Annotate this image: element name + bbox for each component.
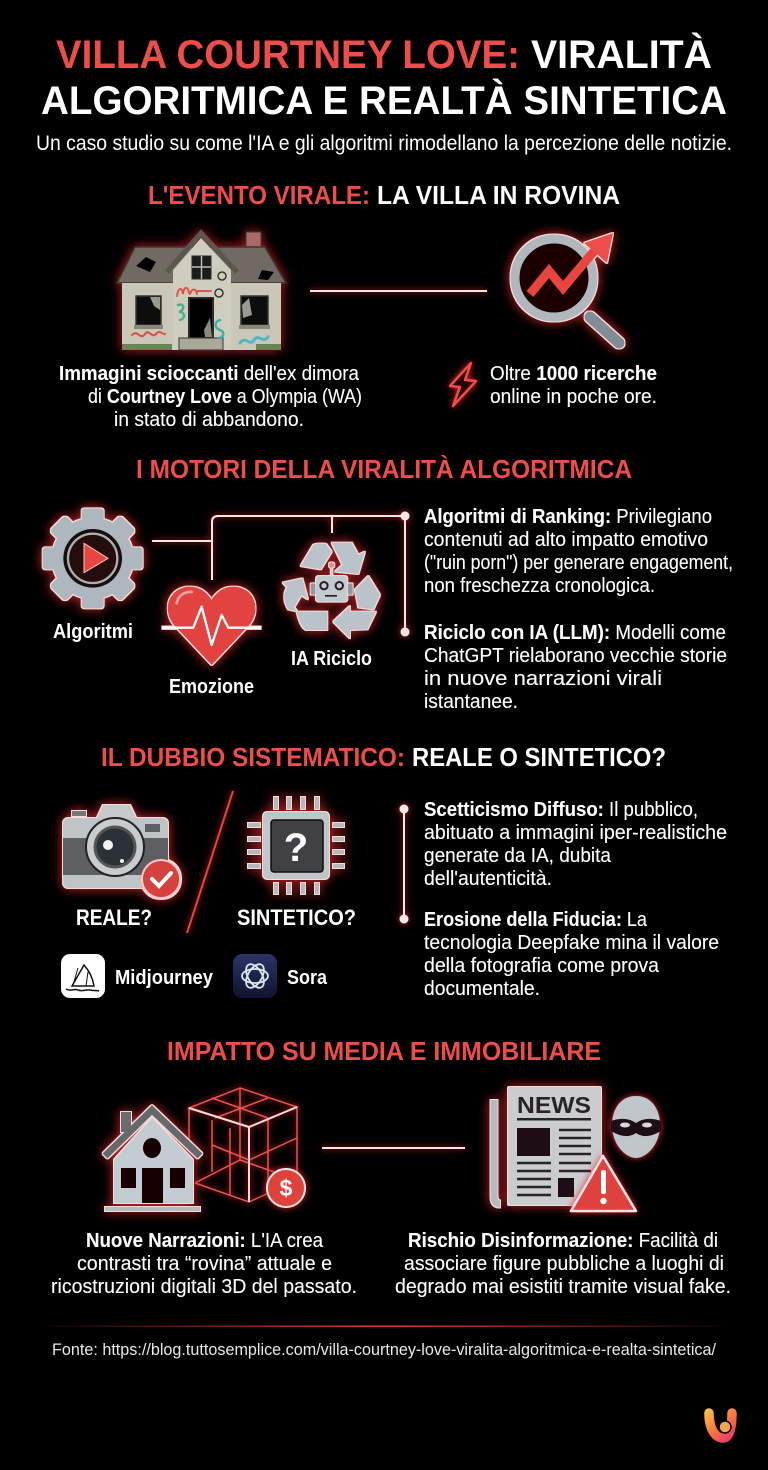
text: oltre 1000 ricerche bbox=[490, 363, 657, 408]
text: scetticismo diffuso bbox=[424, 799, 727, 890]
icon: lightning bbox=[450, 363, 476, 406]
icon: chip with question mark bbox=[248, 797, 344, 894]
source: Fonte: https://blog.tuttosemplice.com/villa-courtney-love-viralita-algoritmica-e-realta-sintetica/ bbox=[52, 1340, 716, 1359]
text: riciclo con ia: Riciclo con IA (LLM): Modelli come bbox=[424, 622, 726, 644]
label: reale: REALE? bbox=[76, 905, 152, 930]
title: ALGORITMICA E REALTÀ SINTETICA bbox=[41, 78, 727, 123]
text: oltre 1000 ricerche: online in poche ore. bbox=[490, 386, 657, 408]
heading: motori: I MOTORI DELLA VIRALITÀ ALGORITMICA bbox=[136, 454, 632, 484]
heading: dubbio sistematico bbox=[101, 742, 666, 772]
icon: recycling robot bbox=[283, 543, 380, 638]
logo tile: sora bbox=[233, 954, 277, 998]
icon: gear with play bbox=[43, 508, 143, 608]
text: immagini scioccanti bbox=[59, 363, 362, 431]
text: nuove narrazioni: ricostruzioni digitali 3D del passato. bbox=[51, 1276, 357, 1298]
text: erosione della fiducia: della fotografia come prova bbox=[424, 955, 660, 977]
title: VIRALITÀ bbox=[531, 32, 712, 77]
text: algoritmi di ranking: Algoritmi di Ranking: Privilegiano bbox=[424, 506, 712, 528]
text: riciclo con ia: ChatGPT rielaborano vecchie storie bbox=[424, 645, 727, 667]
text: scetticismo diffuso: generate da IA, dubita bbox=[424, 845, 612, 867]
icon: newspaper bbox=[494, 1087, 601, 1205]
text: immagini scioccanti: Immagini scioccanti dell'ex dimora bbox=[59, 363, 360, 385]
text: scetticismo diffuso: dell'autenticità. bbox=[424, 868, 552, 890]
heading: l'evento virale: L'EVENTO VIRALE: bbox=[148, 180, 370, 210]
connector line bbox=[310, 290, 487, 292]
footer divider bbox=[35, 1326, 733, 1327]
text: algoritmi di ranking: non freschezza cronologica. bbox=[424, 575, 655, 597]
connector with dots bbox=[400, 804, 408, 924]
text: rischio disinformazione: degrado mai esistiti tramite visual fake. bbox=[395, 1276, 731, 1298]
text: nuove narrazioni: contrasti tra “rovina” attuale e bbox=[77, 1253, 332, 1275]
icon: ruined house bbox=[117, 232, 286, 350]
text: riciclo con ia: in nuove narrazioni virali bbox=[424, 668, 662, 690]
heading: l'evento virale bbox=[148, 180, 620, 210]
icon: warning triangle bbox=[571, 1156, 636, 1211]
title: VILLA COURTNEY LOVE: bbox=[56, 33, 520, 77]
text: algoritmi di ranking: ("ruin porn") per generare engagement, bbox=[424, 552, 733, 574]
icon: camera with check bbox=[63, 805, 180, 898]
label: midjourney: Midjourney bbox=[115, 967, 214, 989]
icon: house bbox=[105, 1110, 200, 1211]
text: erosione della fiducia bbox=[424, 909, 719, 1000]
heading: dubbio sistematico: IL DUBBIO SISTEMATICO: bbox=[101, 742, 405, 772]
connector lines and dots bbox=[152, 512, 410, 636]
text: immagini scioccanti: in stato di abbandono. bbox=[114, 409, 304, 431]
text: scetticismo diffuso: abituato a immagini iper-realistiche bbox=[424, 822, 727, 844]
subtitle: Un caso studio su come l'IA e gli algoritmi rimodellano la percezione delle notizie. bbox=[36, 132, 732, 155]
heading: l'evento virale: LA VILLA IN ROVINA bbox=[377, 180, 620, 210]
text: oltre 1000 ricerche: Oltre 1000 ricerche bbox=[490, 363, 657, 385]
slash divider bbox=[187, 791, 233, 933]
text: rischio disinformazione: associare figure pubbliche a luoghi di bbox=[404, 1253, 724, 1275]
icon: anonymous mask bbox=[611, 1096, 661, 1158]
label: ia riciclo: IA Riciclo bbox=[291, 648, 372, 670]
logo tile: midjourney bbox=[61, 954, 105, 998]
text: algoritmi di ranking: contenuti ad alto impatto emotivo bbox=[424, 529, 708, 551]
heading: impatto: IMPATTO SU MEDIA E IMMOBILIARE bbox=[167, 1036, 601, 1066]
text: erosione della fiducia: tecnologia Deepfake mina il valore bbox=[424, 932, 719, 954]
icon: dollar coin: $ bbox=[280, 1175, 293, 1201]
text: rischio disinformazione: Rischio Disinformazione: Facilità di bbox=[408, 1230, 718, 1252]
label: sintetico: SINTETICO? bbox=[237, 905, 356, 930]
icon: heart with pulse bbox=[162, 587, 261, 665]
title bbox=[41, 32, 727, 123]
connector line bbox=[322, 1147, 465, 1149]
label: sora: Sora bbox=[287, 967, 328, 989]
icon: newspaper: NEWS bbox=[517, 1092, 591, 1118]
text: erosione della fiducia: Erosione della Fiducia: La bbox=[424, 909, 648, 931]
text: scetticismo diffuso: Scetticismo Diffuso: Il pubblico, bbox=[424, 799, 698, 821]
icon: dollar coin bbox=[267, 1169, 305, 1207]
icon: chip with question mark: ? bbox=[284, 826, 308, 870]
text: riciclo con ia bbox=[424, 622, 727, 713]
label: emozione: Emozione bbox=[169, 676, 254, 698]
logo bbox=[709, 1413, 732, 1438]
icon: wireframe cube bbox=[189, 1088, 297, 1202]
label: algoritmi: Algoritmi bbox=[53, 621, 133, 643]
text: algoritmi di ranking bbox=[424, 506, 733, 597]
text: nuove narrazioni bbox=[51, 1230, 357, 1298]
heading: dubbio sistematico: REALE O SINTETICO? bbox=[412, 742, 666, 772]
text: erosione della fiducia: documentale. bbox=[424, 978, 540, 1000]
text: immagini scioccanti: di Courtney Love a Olympia (WA) bbox=[88, 386, 362, 408]
text: riciclo con ia: istantanee. bbox=[424, 691, 518, 713]
text: nuove narrazioni: Nuove Narrazioni: L'IA crea bbox=[86, 1230, 324, 1252]
text: rischio disinformazione bbox=[395, 1230, 731, 1298]
icon: magnifier with rising arrow bbox=[515, 233, 619, 343]
